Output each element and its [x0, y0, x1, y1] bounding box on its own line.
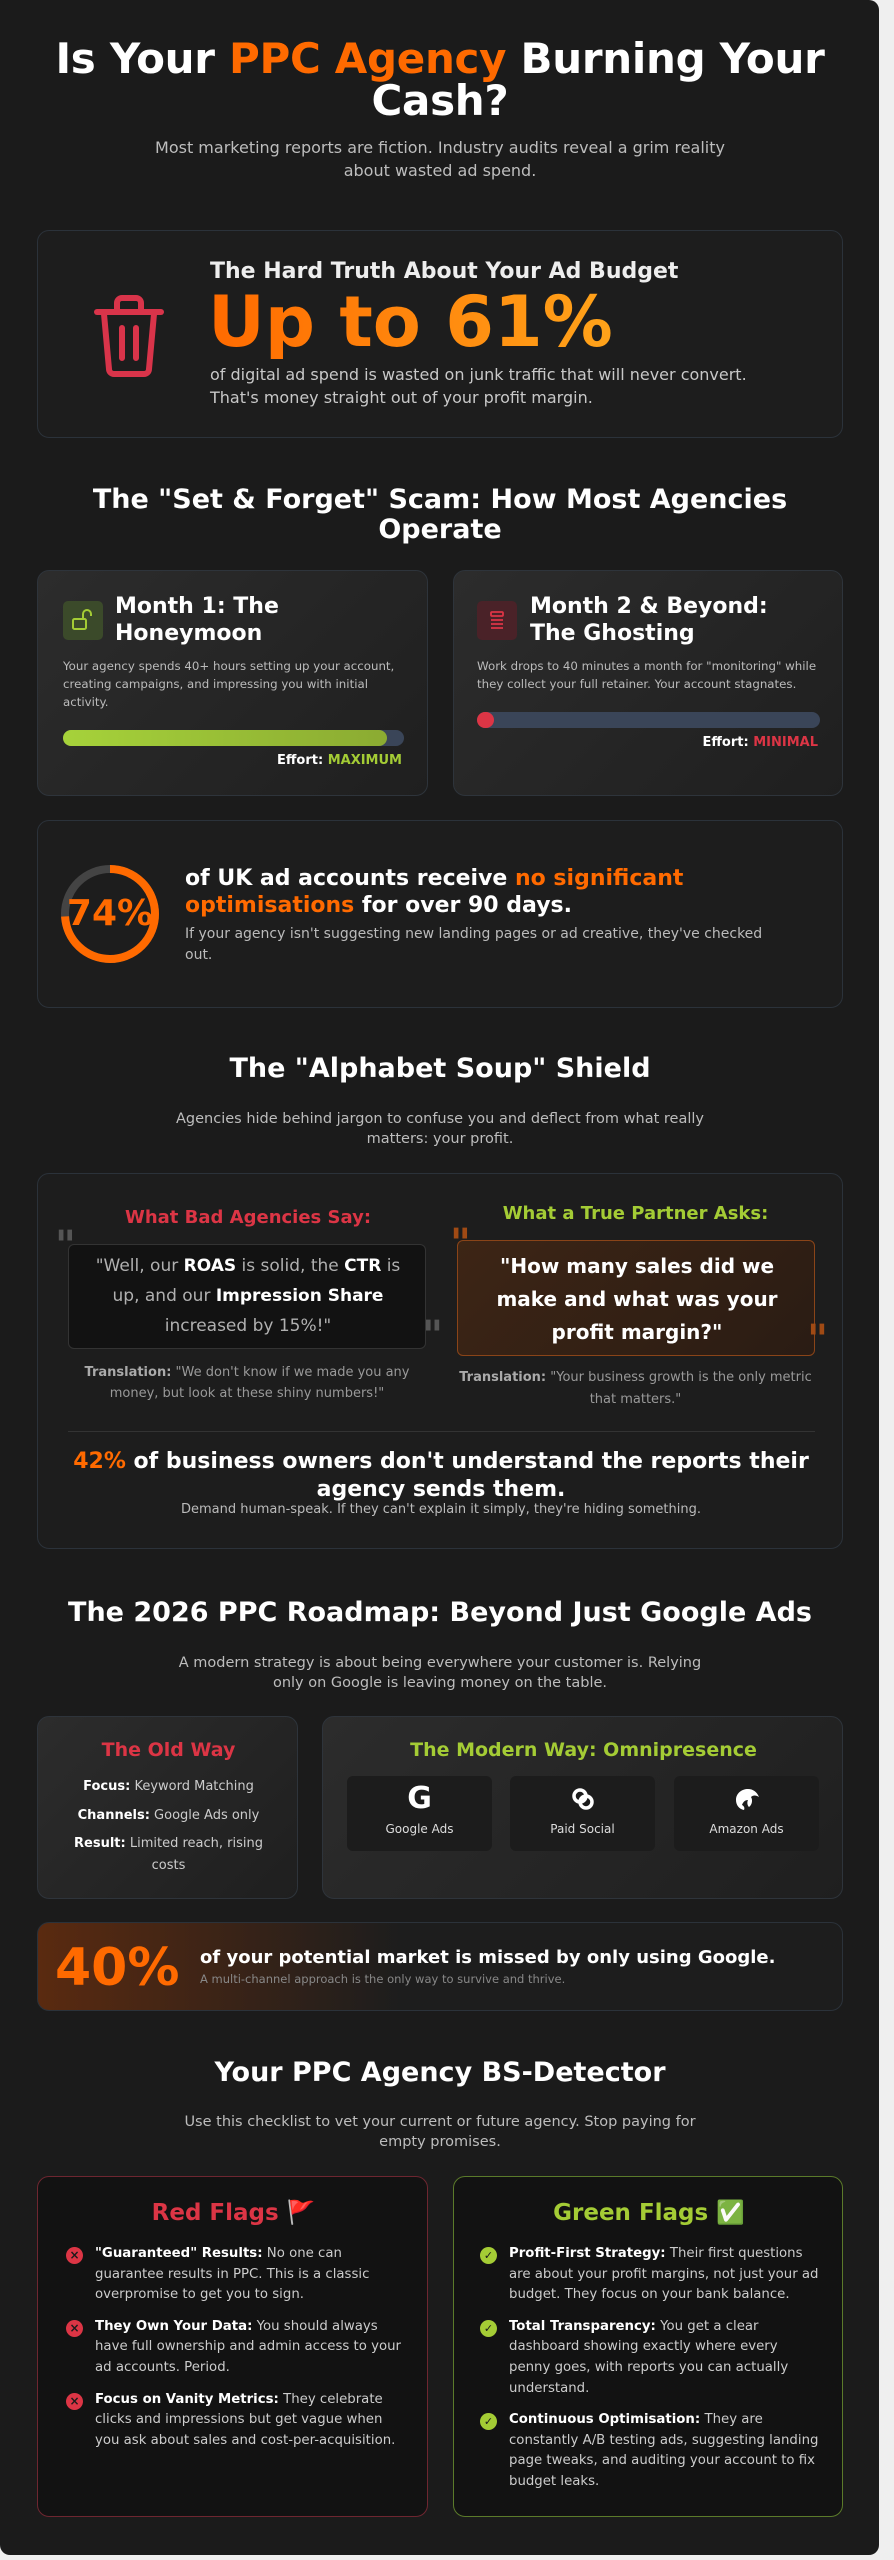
- icon: server: [477, 601, 517, 640]
- item: optimisation: ✓: [484, 2415, 493, 2428]
- heading: bs detector: Your PPC Agency BS-Detector: [214, 2057, 666, 2088]
- item: profit-first: ✓: [484, 2249, 493, 2262]
- panel: 40% stat: [37, 1922, 843, 2011]
- panel: modern way: [322, 1716, 843, 1899]
- item: guaranteed results: "Guaranteed" Results: No one can guarantee results in PPC. This is a classic overpromise to get you to sign.: [95, 2246, 369, 2302]
- panel: 74% stat: [37, 820, 843, 1008]
- subtitle: alphabet soup: Agencies hide behind jargon to confuse you and deflect from what really matters: your profit.: [176, 1111, 704, 1147]
- title: Month 1: The: [115, 594, 279, 619]
- 40% note: A multi-channel approach is the only way to survive and thrive.: [200, 1972, 565, 1986]
- heading: roadmap: The 2026 PPC Roadmap: Beyond Just Google Ads: [68, 1597, 812, 1628]
- chart: donut 74%: [61, 865, 159, 963]
- bad translation: Translation: "We don't know if we made you any money, but look at these shiny numbers!": [84, 1365, 410, 1401]
- title: Is Your PPC Agency Burning Your Cash?: [55, 34, 824, 125]
- heading: alphabet soup: The "Alphabet Soup" Shield: [229, 1053, 651, 1084]
- panel: red flags: [37, 2176, 428, 2517]
- subtitle: Most marketing reports are fiction. Industry audits reveal a grim reality about wasted ad spend.: [155, 138, 725, 180]
- old way list: Result: Limited reach, rising costs: [74, 1836, 263, 1873]
- subtitle: bs detector: Use this checklist to vet your current or future agency. Stop paying for empty promises.: [184, 2114, 696, 2150]
- big 40%: 40%: [55, 1938, 179, 1998]
- title: Honeymoon: [115, 621, 262, 646]
- item: guaranteed results: ×: [69, 2248, 80, 2262]
- bad quote box: "Well, our ROAS is solid, the CTR is up, and our Impression Share increased by 15%!": [96, 1256, 400, 1336]
- item: transparency: Total Transparency: You get a clear dashboard showing exactly where every penny goes, with reports you can actually understand.: [509, 2319, 788, 2396]
- item: transparency: ✓: [484, 2322, 493, 2335]
- heading: The Hard Truth About Your Ad Budget: [210, 259, 678, 284]
- 42% note: Demand human-speak. If they can't explain it simply, they're hiding something.: [181, 1502, 701, 1517]
- panel: old way: [37, 1716, 298, 1899]
- 40% text: of your potential market is missed by only using Google.: [200, 1947, 775, 1968]
- green flag list: [480, 2246, 818, 2489]
- partner quote box: "How many sales did we make and what was your profit margin?": [496, 1254, 778, 1344]
- red flags heading: Red Flags 🚩: [152, 2200, 315, 2226]
- bar: effort minimal: [477, 712, 820, 728]
- panel: jargon comparison: ": [422, 1313, 443, 1359]
- item: own your data: They Own Your Data: You should always have full ownership and admin access to your ad accounts. Period.: [95, 2319, 401, 2375]
- 42% stat: 42% of business owners don't understand the reports their agency sends them.: [73, 1449, 809, 1502]
- item: vanity metrics: Focus on Vanity Metrics: They celebrate clicks and impressions but get vague when you ask about sales and cost-per-acquisition.: [95, 2392, 395, 2448]
- partner translation: Translation: "Your business growth is the only metric that matters.": [459, 1370, 812, 1407]
- red flag list: [66, 2246, 401, 2448]
- panel: hard truth: [37, 230, 843, 438]
- old way list: Focus: Keyword Matching: [83, 1779, 254, 1794]
- title: [115, 594, 279, 646]
- title: Month 2 & Beyond:: [530, 594, 768, 619]
- panel: month 2: [453, 570, 843, 796]
- big stat: Up to 61%: [208, 281, 613, 363]
- partner quote box: [457, 1240, 815, 1356]
- tile: amazon ads: Amazon Ads: [709, 1822, 784, 1836]
- green flags heading: Green Flags ✅: [553, 2200, 745, 2226]
- panel: jargon comparison: [37, 1173, 843, 1549]
- subtitle: roadmap: A modern strategy is about being everywhere your customer is. Relying only on Google is leaving money on the table.: [179, 1655, 701, 1691]
- old way heading: The Old Way: [102, 1739, 235, 1761]
- panel: jargon comparison: ": [807, 1317, 828, 1363]
- icon: trash: [94, 295, 164, 377]
- panel: month 1: [37, 570, 428, 796]
- tile: google ads: Google Ads: [386, 1822, 454, 1836]
- body: Work drops to 40 minutes a month for "monitoring" while they collect your full retainer. Your account stagnates.: [477, 659, 816, 691]
- chart: donut 74%: 74%: [67, 893, 153, 934]
- tile: google ads: G: [407, 1781, 432, 1816]
- body: Your agency spends 40+ hours setting up your account, creating campaigns, and impressing you with initial activity.: [63, 659, 394, 709]
- panel: jargon comparison: ": [55, 1223, 76, 1269]
- stat note: If your agency isn't suggesting new landing pages or ad creative, they've checked out.: [185, 926, 762, 963]
- partner heading: What a True Partner Asks:: [503, 1203, 768, 1224]
- item: optimisation: Continuous Optimisation: They are constantly A/B testing ads, suggesting landing page tweaks, and auditing your account to fix budget leaks.: [509, 2412, 818, 2489]
- old way list: [74, 1779, 263, 1873]
- effort label: Effort: MAXIMUM: [277, 753, 402, 768]
- body: of digital ad spend is wasted on junk traffic that will never convert. That's money straight out of your profit margin.: [210, 365, 747, 407]
- panel: green flags: [453, 2176, 843, 2517]
- effort label: Effort: MINIMAL: [703, 735, 818, 750]
- title: [530, 594, 768, 646]
- item: vanity metrics: ×: [69, 2394, 80, 2408]
- icon: unlock: [63, 601, 103, 640]
- bad quote box: [68, 1244, 426, 1349]
- bar: effort maximum: [63, 730, 404, 746]
- item: own your data: ×: [69, 2321, 80, 2335]
- tile: paid social: [510, 1776, 655, 1851]
- title: The Ghosting: [530, 621, 695, 646]
- tile: paid social: Paid Social: [550, 1822, 615, 1836]
- partner quote box: ": [450, 1221, 471, 1267]
- modern heading: The Modern Way: Omnipresence: [410, 1739, 757, 1761]
- heading: set and forget: The "Set & Forget" Scam: How Most Agencies Operate: [93, 484, 787, 545]
- stat heading: of UK ad accounts receive no significant optimisations for over 90 days.: [185, 866, 683, 918]
- bad agencies heading: What Bad Agencies Say:: [125, 1207, 371, 1228]
- old way list: Channels: Google Ads only: [78, 1808, 259, 1823]
- tile: google ads: [347, 1776, 492, 1851]
- tile: amazon ads: [674, 1776, 819, 1851]
- item: profit-first: Profit-First Strategy: Their first questions are about your profit margins, not just your ad budget. They focus on your bank balance.: [509, 2246, 818, 2302]
